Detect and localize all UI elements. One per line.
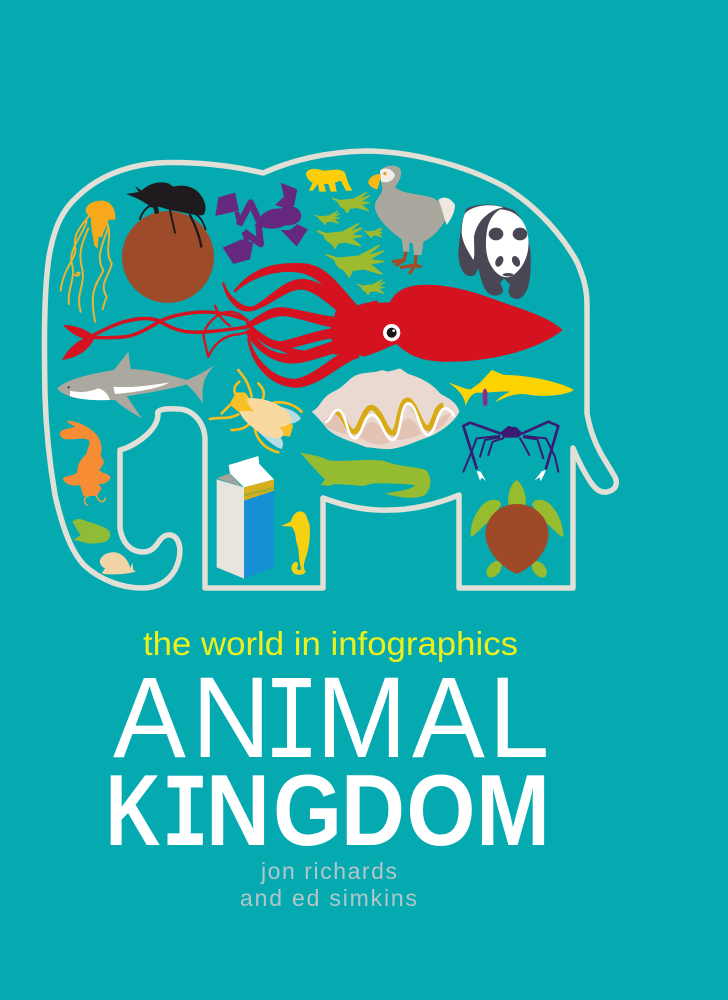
salamander [60, 421, 111, 505]
fly [210, 370, 302, 452]
seahorse [281, 511, 310, 575]
whale shark with diver [448, 370, 574, 406]
giant squid [62, 264, 563, 387]
grasshopper 4 [364, 228, 382, 238]
title: kingdom: N [206, 755, 270, 867]
squid fins [62, 325, 95, 360]
author: ed simkins: and ed simkins [240, 885, 417, 911]
dodo [368, 166, 455, 273]
author: jon richards: jon richards [260, 858, 397, 884]
title: kingdom: G [273, 755, 342, 867]
title: kingdom: D [341, 755, 405, 867]
grasshopper 6 [357, 280, 384, 295]
grasshopper 2 [315, 211, 339, 225]
milk carton [217, 456, 274, 579]
title: animal [113, 652, 549, 793]
title: kingdom: K [106, 753, 160, 866]
title: animal: A [113, 652, 186, 782]
title: animal: N [192, 652, 271, 782]
title: kingdom: O [406, 755, 476, 867]
panda [458, 204, 531, 299]
grasshopper 1 [333, 192, 369, 213]
jellyfish [61, 201, 115, 322]
title: animal: A [412, 652, 485, 782]
dung ball [122, 211, 214, 303]
squid long tentacles [90, 312, 247, 338]
snail [100, 552, 136, 574]
crocodile [300, 452, 430, 498]
lion [306, 169, 352, 192]
small frog [72, 519, 110, 544]
spider crab [463, 422, 558, 481]
title: animal: I [263, 658, 320, 793]
purple frog [215, 183, 308, 264]
grasshopper 3 [318, 224, 362, 248]
lion and grasshoppers [306, 169, 384, 295]
great white shark [57, 352, 215, 418]
series title: the world in infographics [143, 625, 518, 662]
dung beetle [126, 182, 206, 247]
elephant outline [44, 151, 616, 588]
squid arms [203, 264, 377, 387]
title: animal: L [489, 652, 549, 782]
title: kingdom: M [476, 755, 550, 867]
giant clam [312, 368, 459, 449]
title: kingdom: I [161, 758, 209, 877]
grasshopper 5 [326, 245, 383, 277]
squid body [343, 285, 563, 362]
sea turtle [471, 480, 563, 580]
title: kingdom [106, 753, 550, 877]
title: animal: M [316, 652, 407, 782]
